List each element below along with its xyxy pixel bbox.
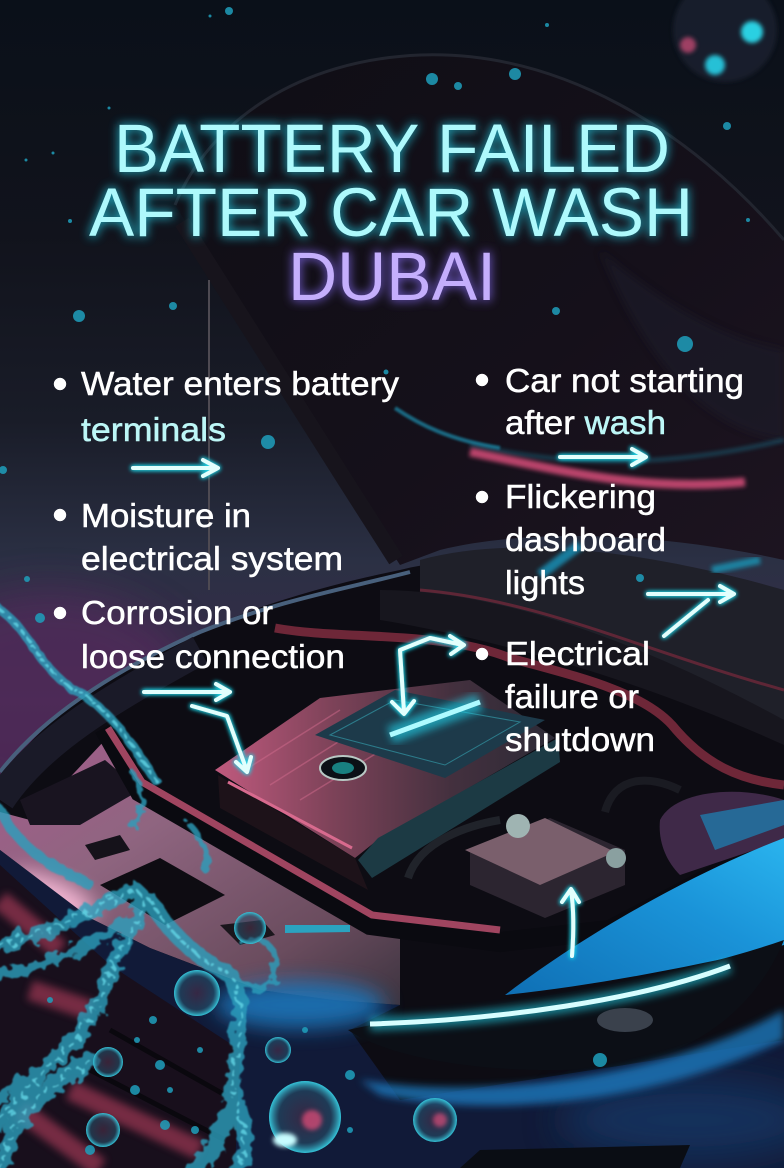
engine bay and car front [0, 545, 784, 1168]
bullet: corrosion or loose connection: loose connection [81, 638, 345, 675]
title text: AFTER CAR WASH [89, 174, 693, 251]
fender [505, 838, 784, 995]
arrow: after wash [560, 449, 646, 465]
bullet: flickering dashboard lights: lights [505, 564, 585, 601]
pink hose [275, 628, 784, 785]
glowing arrows [133, 449, 734, 956]
bullet: moisture in electrical system: electrical system [81, 540, 343, 577]
upper right bay panels [420, 548, 784, 720]
title glow: BATTERY FAILED [114, 110, 670, 187]
bullet: flickering dashboard lights: dashboard [505, 521, 666, 558]
bullet: water enters battery terminals [54, 365, 400, 448]
bullet: corrosion or loose connection: Corrosion or [81, 594, 273, 631]
bullet: electrical failure or shutdown [476, 635, 655, 758]
dark grille and pink bars [0, 865, 240, 1168]
arrow: battery up [562, 889, 579, 956]
title [89, 110, 693, 315]
engine cover [215, 680, 555, 858]
title glow: AFTER CAR WASH [89, 174, 693, 251]
headlight [348, 940, 784, 1070]
bullet: car not starting after wash [476, 362, 744, 441]
bullet: corrosion or loose connection [54, 594, 345, 675]
raised car hood [175, 55, 784, 590]
car body base [0, 560, 784, 1168]
reservoir [660, 792, 784, 875]
bullet: flickering dashboard lights [476, 478, 666, 601]
bullet: water enters battery terminals: Water enters battery [81, 365, 400, 402]
arrow: dashboard lights [648, 586, 734, 636]
title text: DUBAI [288, 238, 496, 315]
arrow: two-way electrical [392, 636, 464, 714]
bullet: moisture in electrical system: Moisture in [81, 497, 251, 534]
right bullet list [476, 362, 744, 758]
bullet: flickering dashboard lights: Flickering [505, 478, 656, 515]
bullet: electrical failure or shutdown: shutdown [505, 721, 655, 758]
title text: BATTERY FAILED [114, 110, 670, 187]
bullet: car not starting after wash: after wash [505, 404, 666, 441]
arrow: to engine cover [192, 706, 251, 772]
arrow: terminals [133, 460, 218, 476]
battery [470, 818, 625, 918]
bullet: water enters battery terminals: terminals [81, 411, 226, 448]
bullet: moisture in electrical system [54, 497, 343, 577]
fender ridge [0, 572, 410, 772]
lower bumper [0, 850, 784, 1168]
arrow: loose connection [144, 684, 230, 700]
bullet: electrical failure or shutdown: failure or [505, 678, 639, 715]
title glow: DUBAI [288, 238, 496, 315]
bullet: electrical failure or shutdown: Electrical [505, 635, 650, 672]
title text [89, 110, 693, 315]
left pink panel [0, 740, 400, 1005]
title glow [89, 110, 693, 315]
left bullet list [54, 365, 400, 675]
water splash [0, 610, 276, 1168]
bullet: car not starting after wash: Car not starting [505, 362, 744, 399]
